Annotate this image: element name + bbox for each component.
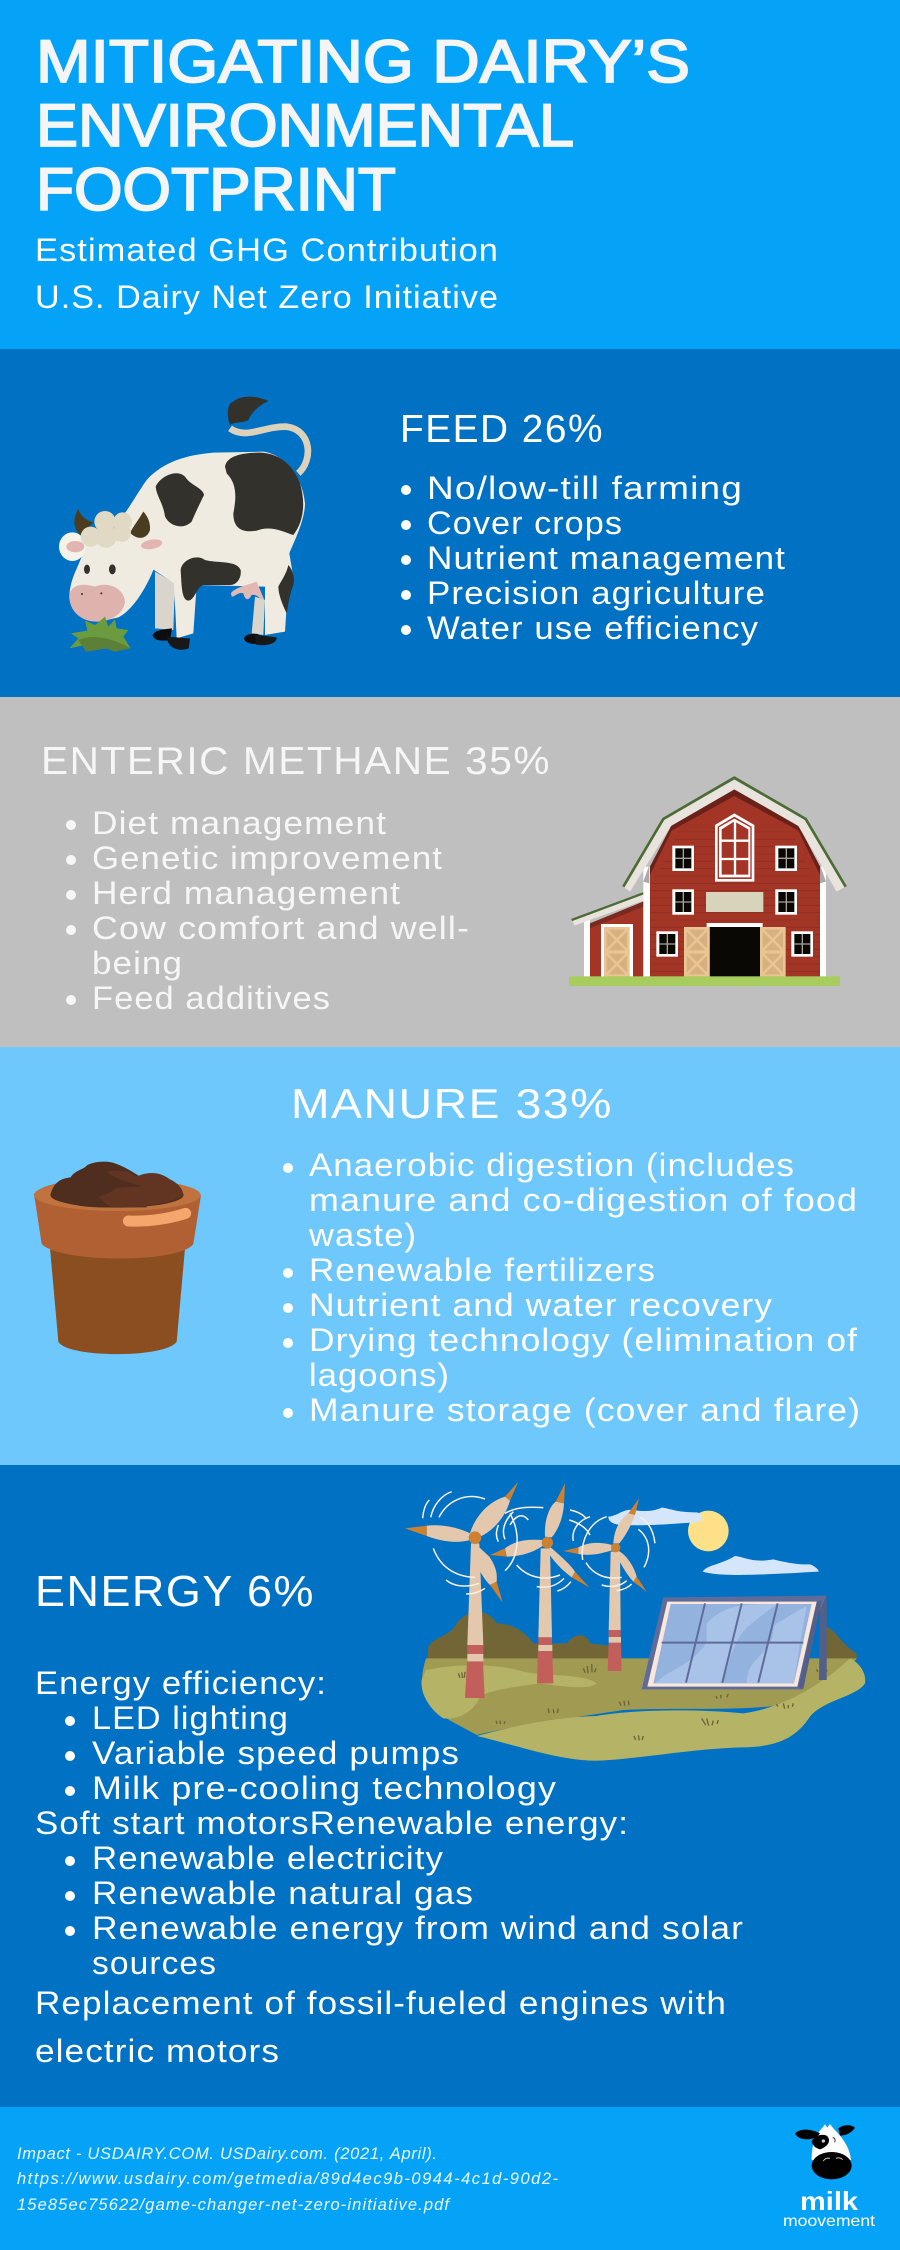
icon: red barn <box>569 778 846 986</box>
subtitle <box>35 232 499 315</box>
text block: energy efficiency and renewable energy lists: electric motors <box>35 2033 280 2069</box>
citation: Impact - USDAIRY.COM. USDairy.com. (2021, April). <box>17 2145 437 2163</box>
list: manure actions: Anaerobic digestion (includes <box>309 1147 795 1183</box>
title: MITIGATING DAIRY’S <box>36 28 690 95</box>
heading: energy: ENERGY 6% <box>35 1567 315 1616</box>
panel: feed <box>0 349 900 697</box>
citation <box>17 2145 558 2214</box>
text block: energy efficiency and renewable energy lists: Energy efficiency: <box>35 1665 327 1701</box>
subtitle: Estimated GHG Contribution <box>35 232 499 268</box>
list: manure actions: lagoons) <box>309 1357 450 1393</box>
citation: https://www.usdairy.com/getmedia/89d4ec9b-0944-4c1d-90d2- <box>17 2170 558 2188</box>
text block: energy efficiency and renewable energy lists <box>35 1665 744 2069</box>
text block: energy efficiency and renewable energy lists: Variable speed pumps <box>92 1735 460 1771</box>
list: manure actions: waste) <box>308 1217 417 1253</box>
illustration: wind turbines and solar panel <box>405 1482 865 1761</box>
list: feed actions: Cover crops <box>427 505 623 541</box>
subtitle: U.S. Dairy Net Zero Initiative <box>35 279 499 315</box>
list: feed actions: Nutrient management <box>427 540 786 576</box>
list: enteric actions <box>66 805 470 1016</box>
text block: energy efficiency and renewable energy lists: LED lighting <box>92 1700 289 1736</box>
logo: milk moovement: milk <box>800 2186 859 2216</box>
text block: energy efficiency and renewable energy lists: Soft start motorsRenewable energy: <box>35 1805 629 1841</box>
text block: energy efficiency and renewable energy lists: Renewable energy from wind and solar <box>92 1910 744 1946</box>
title: ENVIRONMENTAL <box>36 92 574 159</box>
panel: enteric methane <box>0 697 900 1047</box>
icon: flower pot of soil <box>34 1162 201 1354</box>
list: enteric actions: Feed additives <box>92 980 331 1016</box>
text block: energy efficiency and renewable energy lists: Renewable natural gas <box>92 1875 474 1911</box>
list: enteric actions: Genetic improvement <box>92 840 443 876</box>
heading: enteric methane: ENTERIC METHANE 35% <box>41 740 551 783</box>
list: feed actions <box>401 470 786 646</box>
list: manure actions: Manure storage (cover and flare) <box>309 1392 861 1428</box>
text block: energy efficiency and renewable energy lists: Renewable electricity <box>92 1840 444 1876</box>
icon: grazing cow <box>59 397 308 652</box>
title: FOOTPRINT <box>36 156 396 223</box>
list: enteric actions: Diet management <box>92 805 387 841</box>
panel: header <box>0 0 900 349</box>
list: enteric actions: Herd management <box>92 875 401 911</box>
text block: energy efficiency and renewable energy lists: Replacement of fossil-fueled engines with <box>35 1985 727 2021</box>
list: manure actions: Renewable fertilizers <box>309 1252 656 1288</box>
citation: 15e85ec75622/game-changer-net-zero-initiative.pdf <box>17 2196 451 2214</box>
list: manure actions: Drying technology (elimination of <box>309 1322 858 1358</box>
title <box>36 28 690 223</box>
logo: milk moovement: moovement <box>783 2213 876 2230</box>
heading: feed: FEED 26% <box>400 408 604 451</box>
text block: energy efficiency and renewable energy lists: sources <box>92 1945 217 1981</box>
heading: manure: MANURE 33% <box>291 1080 613 1127</box>
list: enteric actions: Cow comfort and well- <box>92 910 470 946</box>
panel: manure <box>0 1047 900 1465</box>
list: enteric actions: being <box>92 945 183 981</box>
list: feed actions: No/low-till farming <box>427 470 743 506</box>
panel: footer <box>0 2107 900 2250</box>
text block: energy efficiency and renewable energy lists: Milk pre-cooling technology <box>92 1770 557 1806</box>
panel: energy <box>0 1465 900 2107</box>
list: manure actions <box>283 1147 861 1428</box>
list: feed actions: Precision agriculture <box>427 575 766 611</box>
list: manure actions: Nutrient and water recovery <box>309 1287 773 1323</box>
list: manure actions: manure and co-digestion of food <box>309 1182 858 1218</box>
list: feed actions: Water use efficiency <box>427 610 759 646</box>
logo: milk moovement <box>783 2124 876 2230</box>
